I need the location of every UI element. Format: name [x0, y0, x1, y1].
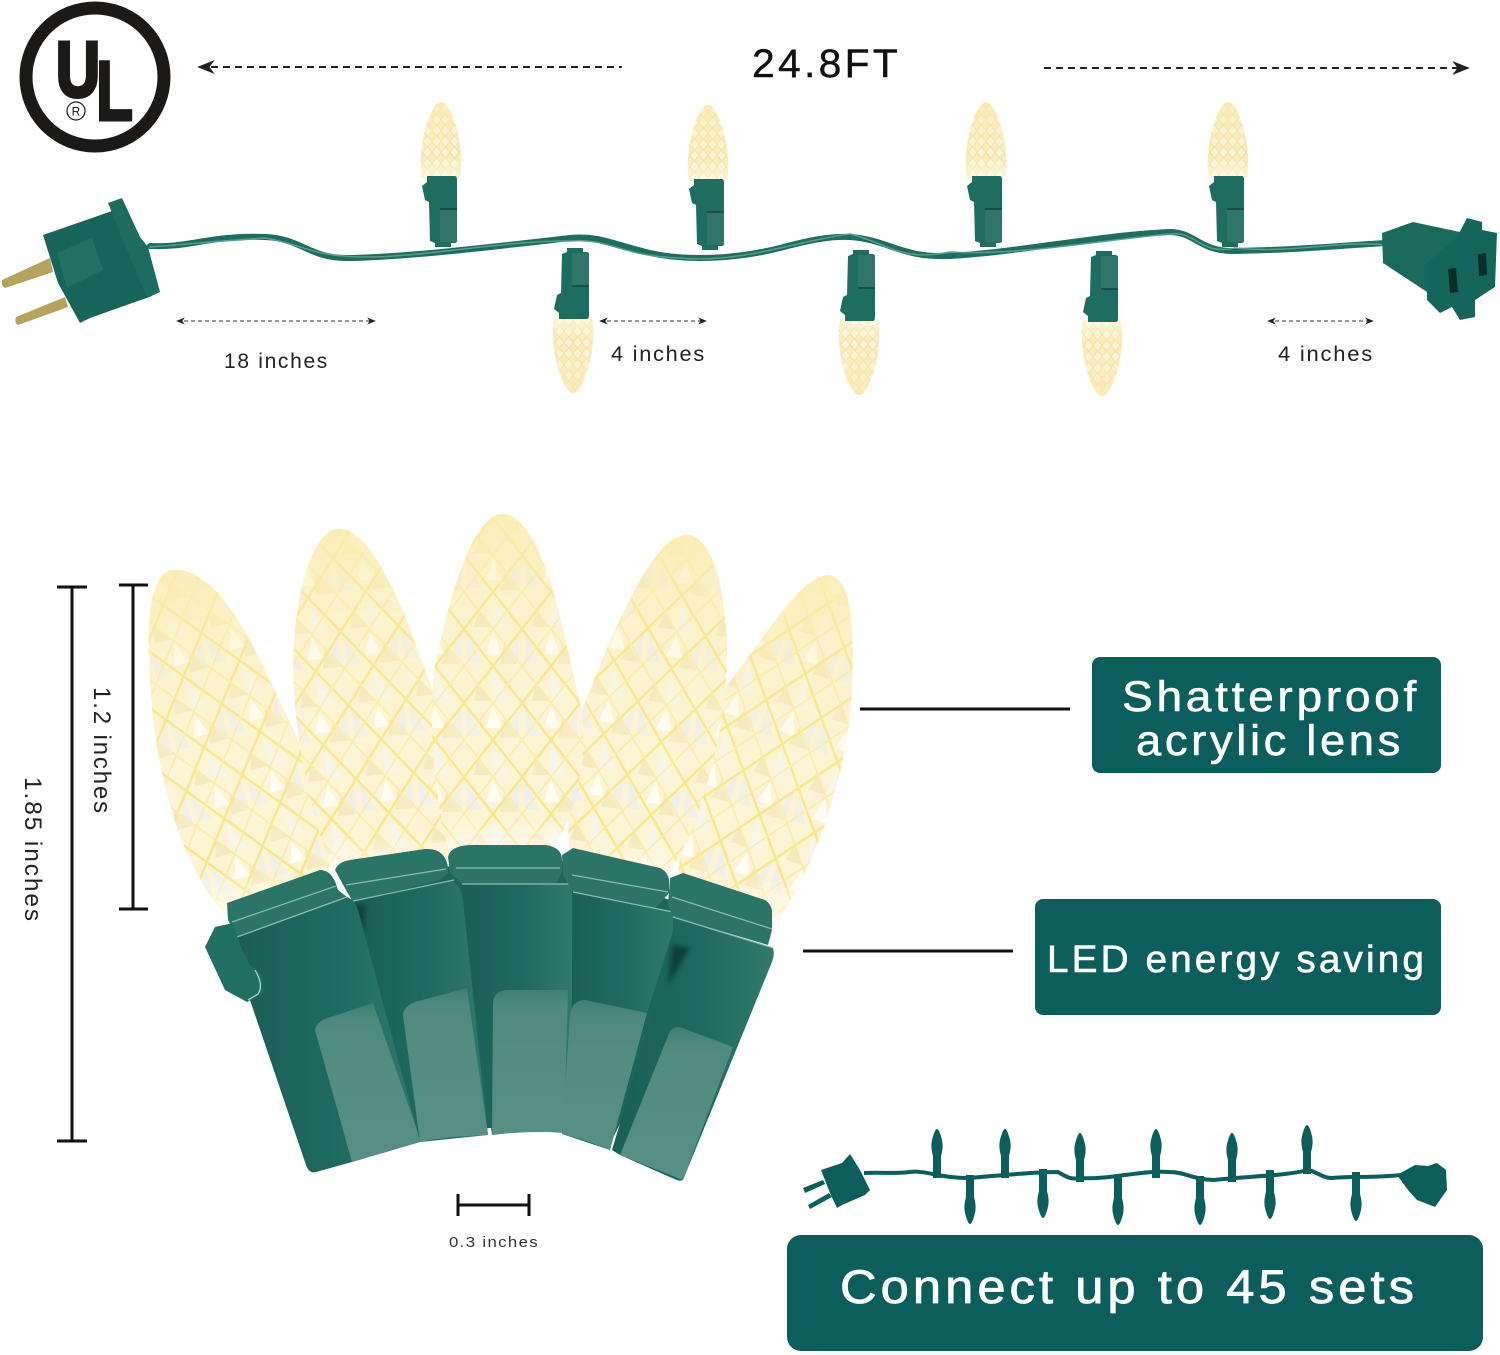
light string wire	[150, 232, 1385, 259]
spacing dimension: 18 inches: 18 inches	[224, 350, 329, 373]
socket 2	[335, 849, 488, 1142]
upward bulbs on string	[421, 102, 1248, 250]
green plastic bulb sockets	[205, 845, 774, 1181]
female connector	[1382, 218, 1497, 320]
UL certification logo	[26, 8, 164, 146]
spacing dimension: 4 inches right	[1268, 321, 1374, 366]
icon: connectable light string silhouette	[803, 1125, 1447, 1225]
large bulbs lens close-up	[149, 514, 853, 920]
male plug	[2, 198, 160, 325]
spacing dimension: 4 inches center: 4 inches	[611, 343, 706, 366]
socket 3	[448, 845, 572, 1135]
callout: shatterproof acrylic lens: acrylic lens	[1136, 717, 1404, 765]
callout: LED energy saving	[803, 899, 1441, 1015]
dimension: 1.2 inches lens height	[88, 585, 148, 909]
dimension: 1.2 inches lens height: 1.2 inches	[88, 687, 115, 815]
socket 5	[612, 873, 774, 1181]
callout: shatterproof acrylic lens	[860, 657, 1441, 773]
callout: shatterproof acrylic lens: Shatterproof	[1122, 673, 1420, 721]
side clip	[205, 923, 263, 1002]
spacing dimension: 4 inches right: 4 inches	[1278, 343, 1374, 366]
socket 4	[562, 848, 674, 1150]
spacing dimension: 4 inches center	[600, 321, 706, 366]
callout: LED energy saving: LED energy saving	[1047, 939, 1427, 981]
dimension: 1.85 inches overall height: 1.85 inches	[19, 777, 46, 923]
callout: connect up to 45 sets: Connect up to 45 sets	[840, 1260, 1418, 1313]
UL certification logo: R	[72, 104, 81, 118]
UL certification logo: U	[56, 25, 100, 113]
socket 1	[205, 870, 420, 1172]
UL certification logo: L	[96, 44, 133, 138]
downward bulbs on string	[553, 248, 1122, 396]
dimension: 0.3 inches width	[449, 1194, 539, 1251]
callout: connect up to 45 sets	[787, 1235, 1483, 1351]
total length dimension: 24.8FT: 24.8FT	[752, 42, 901, 86]
dimension: 0.3 inches width: 0.3 inches	[449, 1234, 539, 1251]
dimension: 1.85 inches overall height	[19, 587, 87, 1141]
